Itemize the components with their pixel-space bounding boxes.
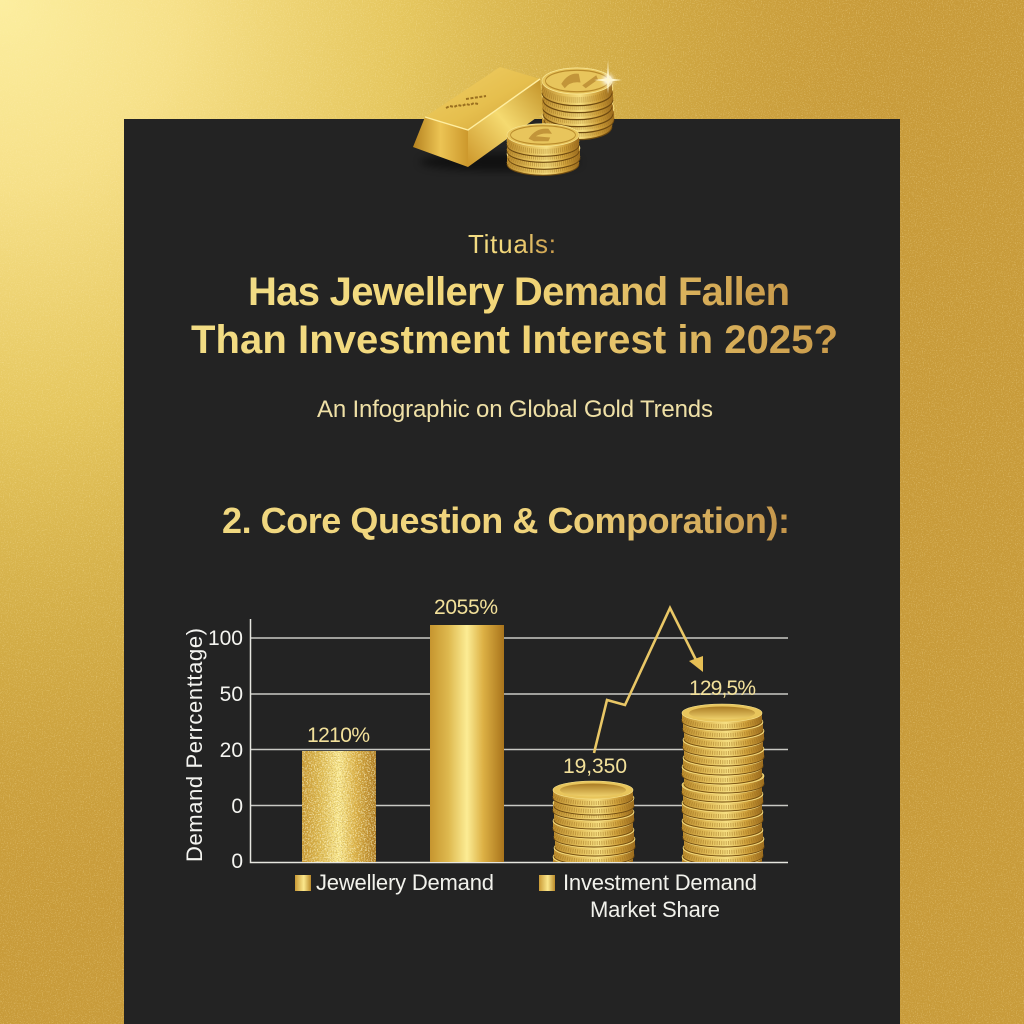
heading: section title: 2. Core Question & Comporation): <box>222 500 790 541</box>
bar: jewellery smooth <box>430 625 504 862</box>
icon: gold bar <box>413 67 543 167</box>
legend: jewellery demand: Jewellery Demand <box>316 870 494 895</box>
y-axis title: Demand Perrcenttage) <box>182 628 207 862</box>
icon: gold bar and coins <box>413 60 622 175</box>
value label: 19,350: 19,350 <box>563 755 627 778</box>
heading: main title <box>191 270 838 362</box>
icon: front coin stack <box>507 124 580 175</box>
value label: 1210%: 1210% <box>307 724 370 747</box>
arrow: trend line <box>594 608 703 753</box>
icon: sparkle <box>594 60 622 94</box>
legend: investment demand market share: Investment Demand <box>563 870 757 895</box>
heading: main title: Than Investment Interest in 2025? <box>191 318 838 362</box>
y-axis labels: 100 <box>208 627 243 650</box>
y-axis labels: 50 <box>220 683 243 706</box>
coin stack: short <box>552 780 636 862</box>
text: eyebrow label: Tituals: <box>468 229 556 259</box>
bar: jewellery textured <box>302 751 376 862</box>
text: subtitle: An Infographic on Global Gold Trends <box>317 396 713 423</box>
value label: 129,5%: 129,5% <box>689 677 756 700</box>
legend: investment demand market share: Market Share <box>590 897 720 922</box>
panel: dark main panel <box>124 119 900 1024</box>
y-axis labels <box>208 627 243 873</box>
heading: main title: Has Jewellery Demand Fallen <box>248 270 790 314</box>
y-axis labels: 20 <box>220 739 243 762</box>
chart grid and axes <box>250 619 788 862</box>
icon: back coin stack <box>542 68 614 140</box>
y-axis labels: 0 <box>231 795 243 818</box>
legend: investment demand market share <box>539 870 757 922</box>
y-axis labels: 0 <box>231 850 243 873</box>
chart: demand bar chart <box>182 596 788 922</box>
value label: 2055%: 2055% <box>434 596 498 619</box>
coin stack: tall <box>682 704 764 874</box>
